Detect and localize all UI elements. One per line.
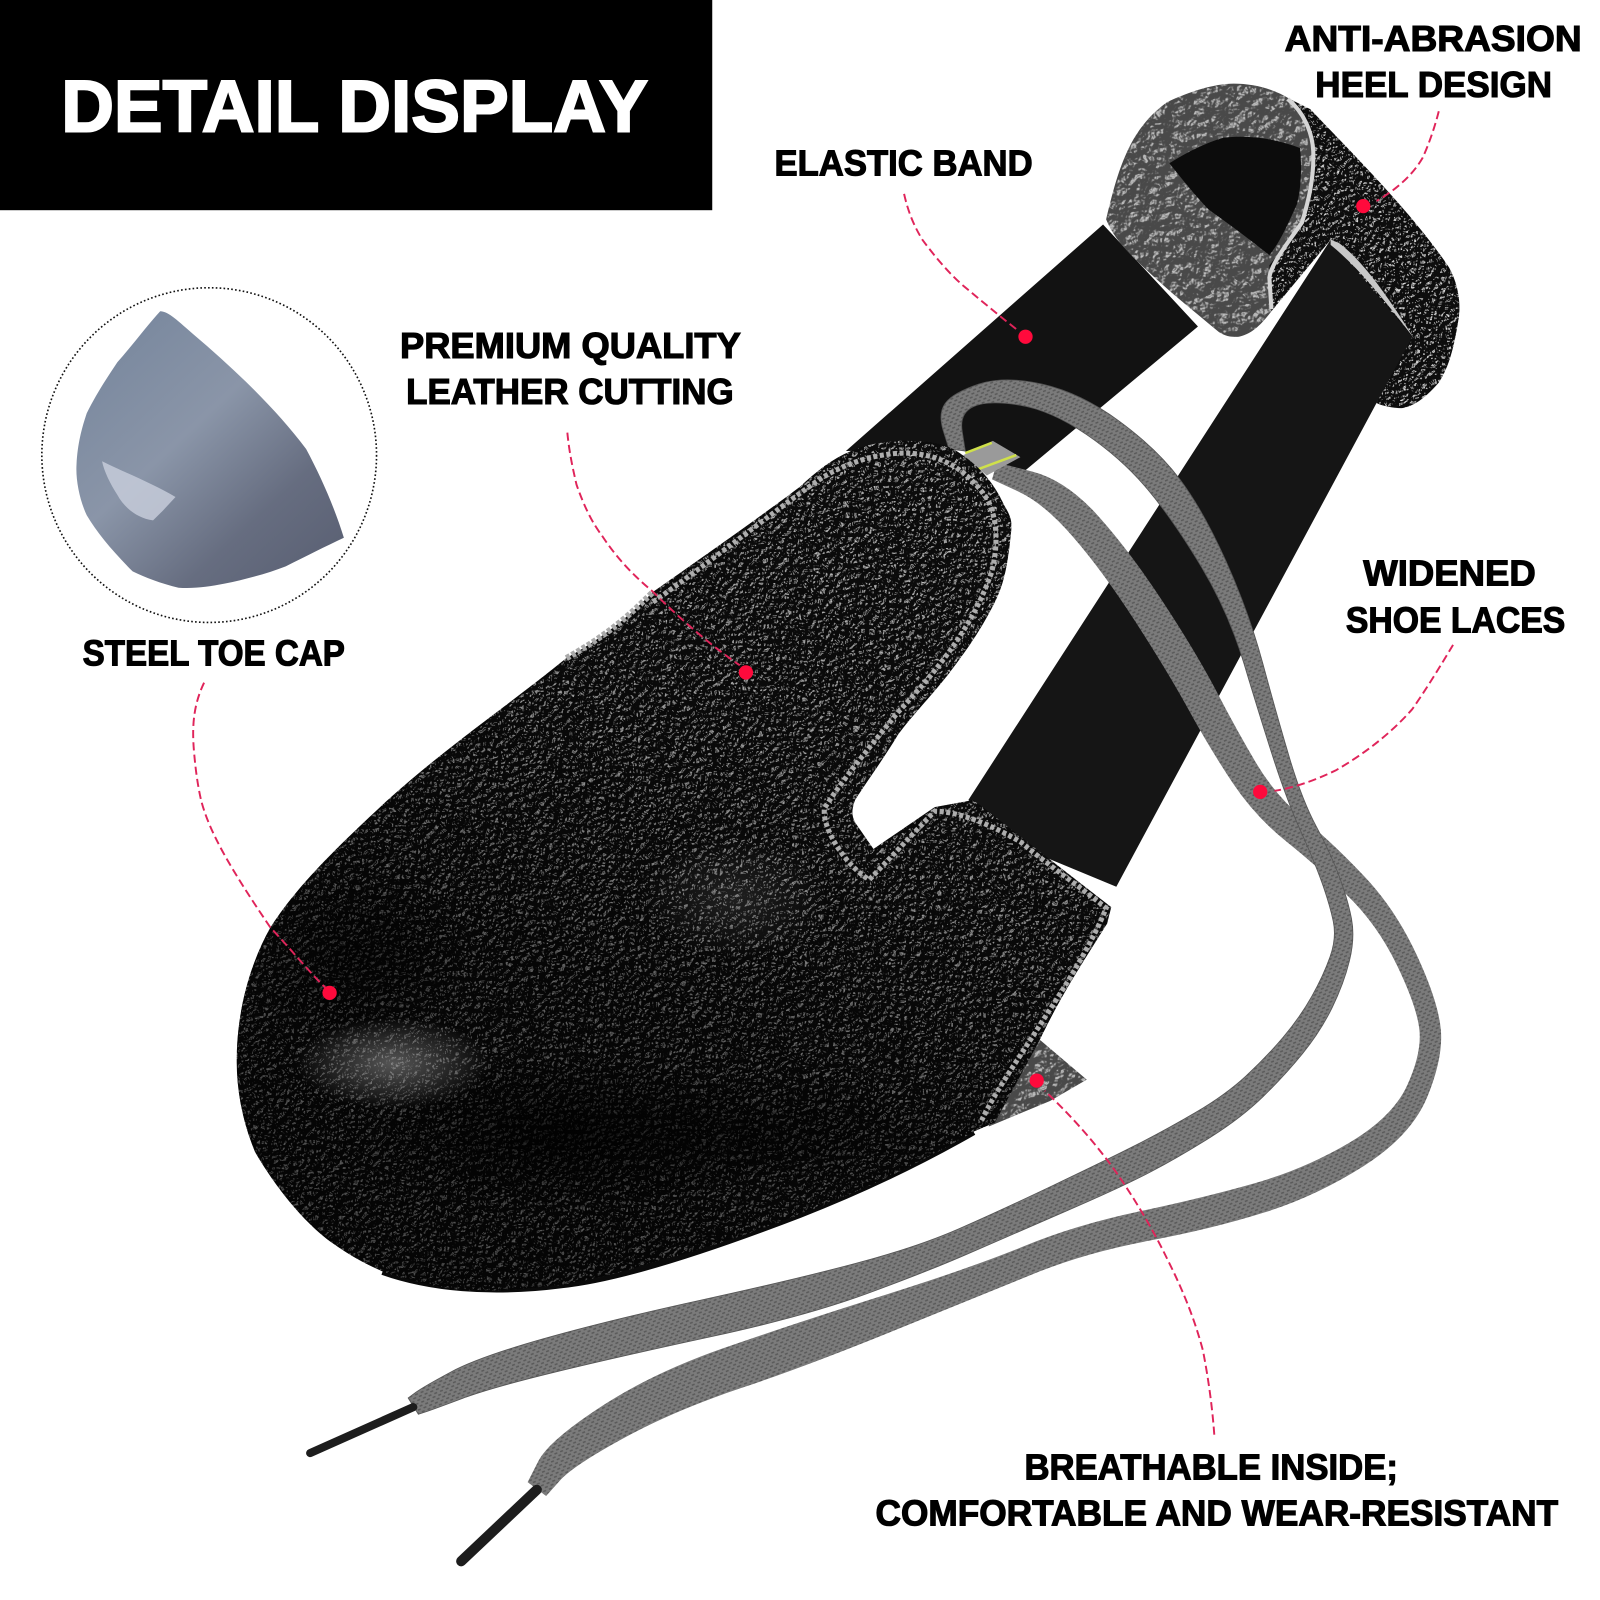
- eyelet tag: [963, 441, 1020, 476]
- panel: steel toe cap inset: [42, 288, 377, 622]
- callout: elastic band: [904, 194, 1033, 344]
- title banner: [0, 0, 712, 210]
- elastic band: left strap: [846, 224, 1198, 474]
- label: breathable inside: COMFORTABLE AND WEAR-RESISTANT: [876, 1494, 1558, 1534]
- label: breathable inside: [876, 1448, 1558, 1534]
- callout: steel toe cap: [193, 683, 337, 1000]
- callout: premium leather: [567, 433, 753, 680]
- label: premium quality leather cutting: [400, 326, 741, 412]
- label: widened shoe laces: WIDENED: [1363, 554, 1536, 594]
- lining fold at tongue edge: [566, 592, 653, 658]
- label: anti-abrasion heel design: ANTI-ABRASION: [1285, 19, 1582, 59]
- label: widened shoe laces: SHOE LACES: [1346, 601, 1565, 641]
- lace tip: upper aglet: [310, 1407, 413, 1453]
- title text: DETAIL DISPLAY: [61, 65, 648, 148]
- label: anti-abrasion heel design: HEEL DESIGN: [1315, 65, 1552, 105]
- stitched seam: [653, 453, 1106, 1120]
- icon: grey steel toe cap: [76, 311, 344, 588]
- heel: pale cut edge: [1269, 99, 1313, 309]
- leather shading: [224, 429, 1122, 1306]
- heel: grey suede inside: [1106, 84, 1313, 337]
- cap reflection: [102, 461, 176, 520]
- heel: strap slit: [1331, 240, 1414, 339]
- elastic band: right strap: [968, 240, 1418, 887]
- lace tip: lower aglet: [461, 1490, 537, 1561]
- laces: [310, 380, 1440, 1561]
- heel: dark inner lining: [1169, 137, 1301, 255]
- label: premium quality leather cutting: PREMIUM QUALITY: [400, 326, 741, 366]
- label: breathable inside: BREATHABLE INSIDE;: [1024, 1448, 1398, 1488]
- label: premium quality leather cutting: LEATHER CUTTING: [406, 372, 734, 412]
- heel: black leather outer: [1245, 99, 1459, 408]
- label: steel toe cap: STEEL TOE CAP: [83, 633, 345, 673]
- callout: breathable lining: [1030, 1073, 1214, 1435]
- callout: widened laces: [1253, 645, 1453, 799]
- label: widened shoe laces: [1346, 554, 1565, 641]
- breathable lining flap: [989, 1040, 1087, 1127]
- leather upper: [237, 441, 1111, 1291]
- callout: anti-abrasion heel: [1356, 111, 1439, 213]
- label: elastic band: ELASTIC BAND: [774, 144, 1033, 184]
- shoe toe cover: [224, 429, 1122, 1306]
- lace: outer run with lower tail: [530, 464, 1440, 1494]
- sole edge: [383, 1132, 973, 1289]
- lace: top loop and inner run with upper tail: [408, 380, 1353, 1414]
- label: anti-abrasion heel design: [1285, 19, 1582, 105]
- heel leather loop: [1106, 84, 1459, 408]
